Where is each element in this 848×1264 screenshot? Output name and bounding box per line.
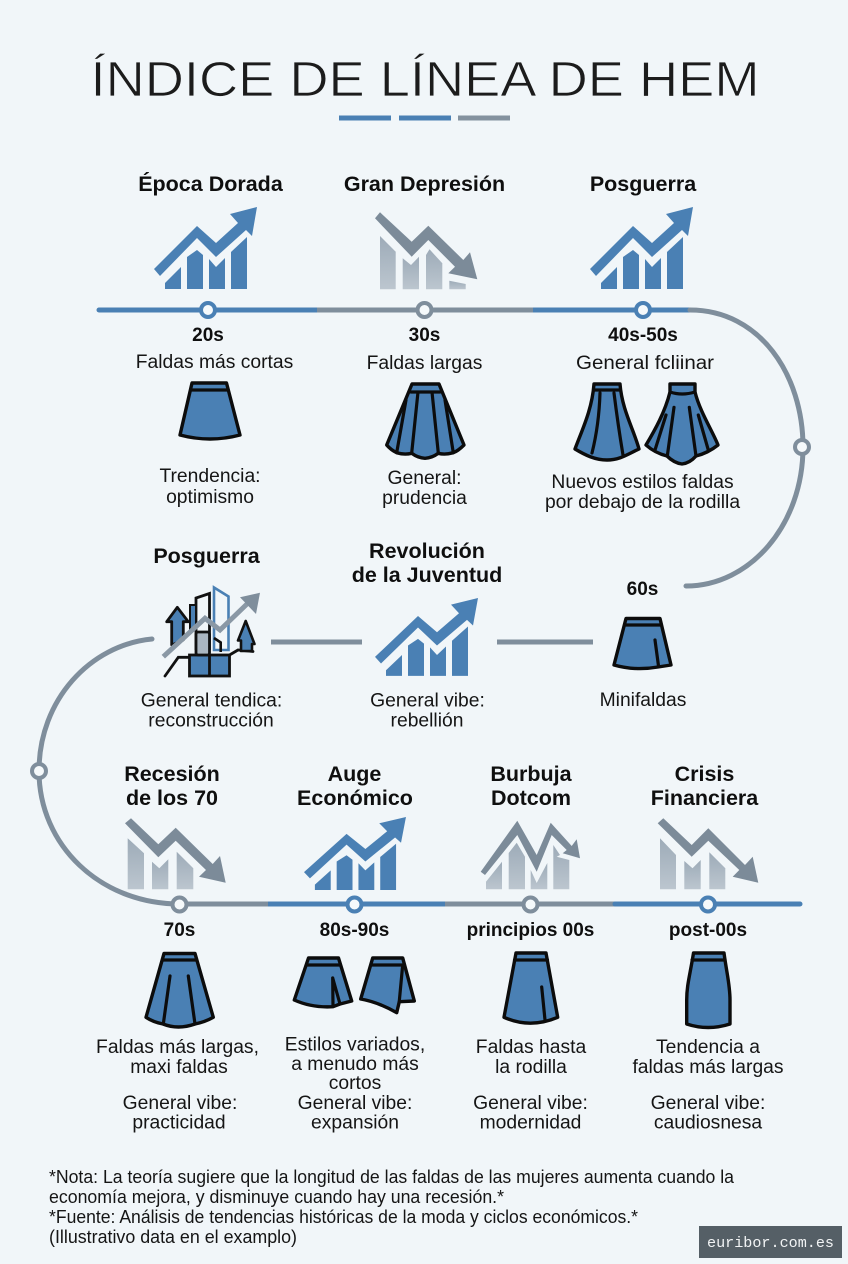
trend text: reconstrucción	[148, 710, 274, 732]
timeline node	[201, 303, 215, 317]
heading: Posguerra	[590, 172, 697, 196]
description: Faldas hasta	[476, 1037, 586, 1058]
timeline node	[418, 303, 432, 317]
date: 20s	[192, 325, 224, 346]
description: maxi faldas	[130, 1057, 228, 1078]
trend text: modernidad	[480, 1112, 581, 1134]
panel: Crisis Financiera	[632, 762, 784, 1134]
description: General fcliinar	[576, 353, 715, 374]
heading: Revolución	[369, 539, 485, 563]
trend text: optimismo	[166, 487, 254, 508]
panel: Burbuja Dotcom	[467, 762, 594, 1134]
panel: 60s	[600, 579, 686, 711]
heading: Recesión	[124, 762, 220, 786]
trend text: General:	[388, 468, 461, 489]
icon: chart down	[125, 818, 226, 889]
heading: Época Dorada	[138, 171, 284, 196]
trend text: General vibe:	[298, 1093, 412, 1114]
heading: de los 70	[126, 786, 218, 810]
icon: chart volatile	[481, 821, 580, 889]
footnote	[49, 1167, 735, 1247]
date: 80s-90s	[320, 920, 389, 941]
description: cortos	[329, 1073, 381, 1094]
icon: skirt B	[646, 384, 718, 464]
footnote: (Illustrativo data en el examplo)	[49, 1227, 297, 1247]
trend text: caudiosnesa	[654, 1112, 762, 1134]
icon: skirt	[387, 384, 464, 458]
panel: Época Dorada	[136, 171, 293, 508]
icon: skirt B	[361, 958, 414, 1013]
icon: skirt	[180, 383, 240, 439]
heading: Auge	[328, 762, 381, 786]
icon: chart down	[658, 818, 758, 889]
heading: de la Juventud	[352, 563, 502, 587]
watermark	[699, 1226, 842, 1258]
timeline node	[701, 898, 715, 912]
description: Faldas largas	[367, 353, 482, 374]
trend text: General vibe:	[370, 690, 485, 712]
icon: skirt	[687, 953, 730, 1028]
date: 30s	[409, 325, 440, 346]
panel: Auge Económico	[285, 762, 425, 1134]
icon: chart up	[375, 598, 478, 676]
date: post-00s	[669, 920, 747, 941]
trend text: practicidad	[132, 1112, 226, 1134]
trend text: por debajo de la rodilla	[545, 492, 740, 513]
trend text: General vibe:	[473, 1093, 588, 1114]
icon: chart up	[304, 817, 406, 890]
description: faldas más largas	[632, 1057, 784, 1078]
icon: skirt A	[294, 958, 352, 1007]
heading: Financiera	[651, 786, 759, 810]
footnote: *Fuente: Análisis de tendencias históricas de la moda y ciclos económicos.*	[49, 1207, 638, 1227]
description: Estilos variados,	[285, 1034, 425, 1056]
footnote: economía mejora, y disminuye cuando hay una recesión.*	[49, 1187, 504, 1207]
panel: Posguerra reconstrucción	[141, 544, 282, 732]
trend text: General vibe:	[123, 1093, 237, 1114]
date: 70s	[164, 920, 195, 941]
title underline	[339, 116, 510, 120]
panel: Recesión de los 70	[96, 762, 259, 1134]
trend text: rebellión	[391, 710, 463, 732]
icon: skirt	[504, 953, 558, 1023]
title: ÍNDICE DE LÍNEA DE HEM	[90, 53, 760, 107]
trend text: expansión	[311, 1112, 399, 1134]
icon: chart up	[590, 207, 693, 289]
icon: skirt	[146, 954, 213, 1027]
heading: Burbuja	[490, 762, 572, 786]
icon: skirt A	[575, 384, 639, 460]
panel: Revolución de la Juventud	[352, 539, 502, 732]
icon: chart up	[154, 207, 257, 289]
trend text: Trendencia:	[159, 466, 261, 487]
description: a menudo más	[291, 1054, 419, 1075]
footnote: *Nota: La teoría sugiere que la longitud de las faldas de las mujeres aumenta cuando la	[49, 1167, 735, 1187]
heading: Gran Depresión	[344, 172, 505, 196]
trend text: prudencia	[382, 488, 467, 509]
timeline node	[172, 898, 186, 912]
heading: Económico	[297, 786, 413, 810]
timeline node	[348, 898, 362, 912]
timeline path	[32, 310, 809, 904]
heading: Posguerra	[153, 544, 261, 568]
timeline node	[636, 303, 650, 317]
icon: skirt	[614, 618, 671, 669]
heading: Crisis	[675, 762, 734, 786]
watermark: euribor.com.es	[707, 1236, 834, 1252]
heading: Dotcom	[491, 786, 571, 810]
trend text: General tendica:	[141, 690, 282, 712]
date: 60s	[627, 579, 658, 600]
description: Tendencia a	[656, 1037, 760, 1058]
description: la rodilla	[495, 1057, 567, 1078]
description: Minifaldas	[600, 690, 686, 711]
trend text: Nuevos estilos faldas	[551, 472, 734, 493]
date: 40s-50s	[608, 325, 678, 346]
panel: Gran Depresión	[344, 172, 505, 509]
description: Faldas más cortas	[136, 352, 293, 373]
panel: Posguerra 40s-50s	[545, 172, 740, 513]
timeline node	[524, 898, 538, 912]
trend text: General vibe:	[651, 1093, 765, 1114]
icon: chart down	[375, 212, 477, 289]
description: Faldas más largas,	[96, 1037, 259, 1058]
icon: reconstruction	[163, 588, 260, 676]
date: principios 00s	[467, 920, 594, 941]
